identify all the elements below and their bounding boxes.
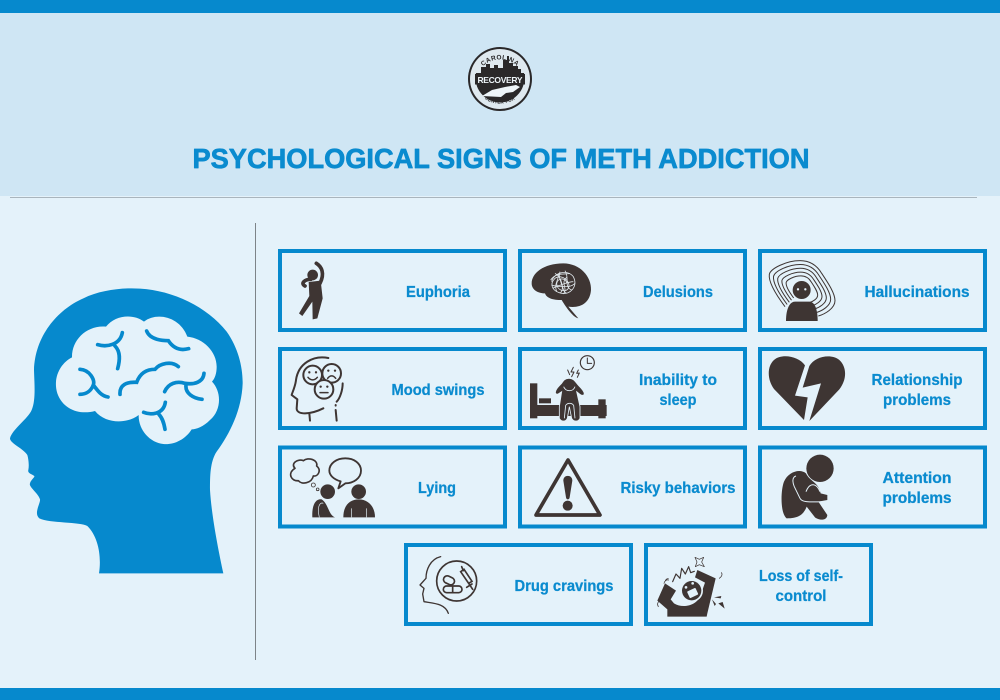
head with brain illustration bbox=[10, 288, 243, 573]
logo: Carolina Recovery Center bbox=[468, 47, 532, 111]
card: Risky behaviors: Risky behaviors bbox=[620, 480, 736, 497]
icon: head with three faces bbox=[292, 357, 343, 421]
card: Attention problems: problems bbox=[882, 490, 952, 507]
card: Lying bbox=[280, 448, 505, 526]
card: Euphoria bbox=[280, 251, 505, 330]
logo: Carolina Recovery Center: CENTER FOR bbox=[485, 98, 515, 104]
icon: person with concentric rings bbox=[769, 261, 835, 321]
card: Delusions: Delusions bbox=[643, 284, 713, 301]
card: Loss of self-control: control bbox=[776, 588, 826, 605]
card: Euphoria: Euphoria bbox=[406, 284, 470, 301]
card: Inability to sleep: Inability to bbox=[639, 372, 717, 389]
logo: Carolina Recovery Center: CAROLINA bbox=[481, 54, 518, 66]
icon: dancing person bbox=[299, 263, 323, 319]
icon: person hugging knees bbox=[782, 455, 834, 520]
card: Inability to sleep bbox=[520, 349, 745, 428]
card: Attention problems: Attention bbox=[882, 470, 952, 487]
card: Drug cravings bbox=[406, 545, 631, 624]
logo: Carolina Recovery Center: RECOVERY bbox=[478, 75, 523, 85]
card: Hallucinations bbox=[760, 251, 985, 330]
icon: broken heart bbox=[769, 356, 845, 421]
icon: brain with tangled thoughts bbox=[532, 263, 591, 318]
icon: person sitting on bed with clock bbox=[530, 356, 607, 421]
card: Drug cravings: Drug cravings bbox=[514, 578, 614, 595]
card: Attention problems bbox=[760, 448, 985, 526]
card: Loss of self-control bbox=[646, 545, 871, 624]
top bar bbox=[0, 0, 1000, 13]
card: Relationship problems: Relationship bbox=[872, 372, 962, 389]
card: Relationship problems bbox=[760, 349, 985, 428]
card: Inability to sleep: sleep bbox=[660, 392, 696, 409]
card: Relationship problems: problems bbox=[883, 392, 951, 409]
card: Lying: Lying bbox=[418, 480, 456, 497]
card: Loss of self-control: Loss of self- bbox=[759, 568, 843, 585]
bottom bar bbox=[0, 688, 1000, 700]
card: Hallucinations: Hallucinations bbox=[864, 284, 970, 301]
card: Delusions bbox=[520, 251, 745, 330]
header band bbox=[0, 13, 1000, 196]
icon: warning triangle bbox=[536, 460, 600, 515]
icon: agitated person bbox=[657, 557, 725, 617]
card: Mood swings: Mood swings bbox=[392, 382, 484, 399]
icon: head thinking of pills and syringe bbox=[420, 557, 477, 613]
card: Risky behaviors bbox=[520, 448, 745, 526]
card: Mood swings bbox=[280, 349, 505, 428]
title: PSYCHOLOGICAL SIGNS OF METH ADDICTION bbox=[192, 143, 810, 174]
icon: two people with thought and speech bubbles bbox=[291, 458, 375, 517]
